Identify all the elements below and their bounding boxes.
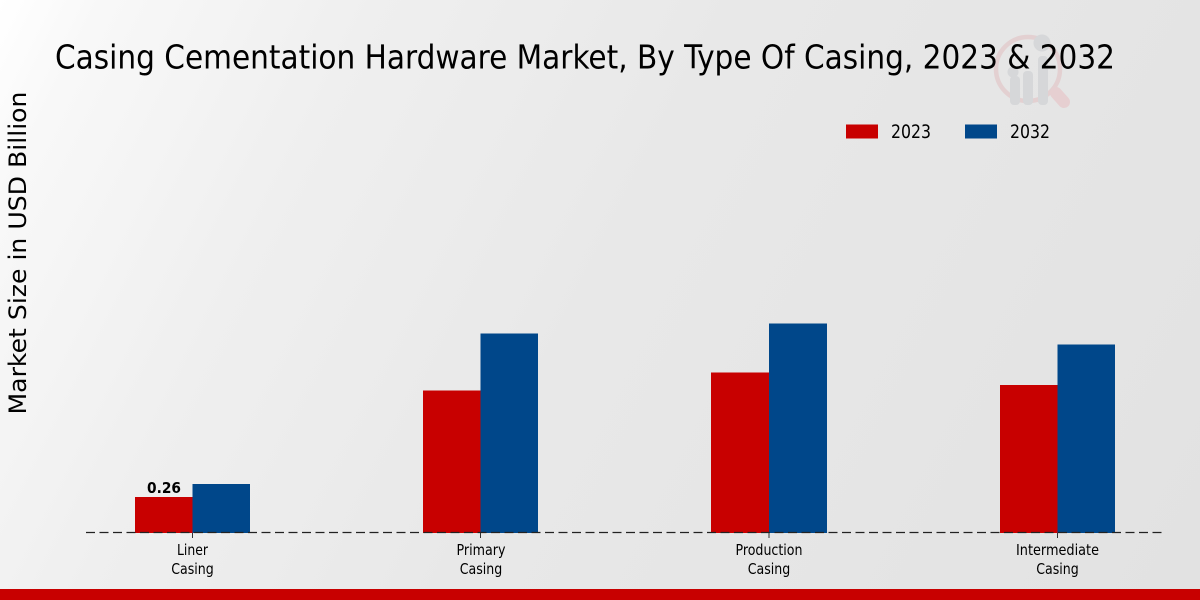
legend item: 2032 bbox=[965, 121, 1050, 143]
category label: Production Casing: Casing bbox=[748, 560, 790, 578]
bar chart bbox=[86, 324, 1164, 578]
category label: Intermediate Casing bbox=[1016, 541, 1099, 578]
category label: Production Casing bbox=[736, 541, 802, 578]
bars: Production Casing bbox=[711, 324, 827, 533]
legend item: 2023: 2023 bbox=[891, 121, 931, 143]
y-axis label: Market Size in USD Billion bbox=[4, 92, 32, 414]
category label: Primary Casing: Primary bbox=[456, 541, 506, 559]
legend item: 2023 bbox=[846, 121, 931, 143]
category label: Liner Casing: Casing bbox=[171, 560, 214, 578]
legend bbox=[846, 121, 1050, 143]
category label: Primary Casing bbox=[456, 541, 506, 578]
bars: Primary Casing bbox=[423, 334, 538, 533]
category label: Intermediate Casing: Casing bbox=[1036, 560, 1079, 578]
bars: Liner Casing bbox=[135, 484, 250, 533]
icon: watermark logo bbox=[996, 34, 1064, 105]
x axis baseline bbox=[86, 532, 1164, 534]
title: Casing Cementation Hardware Market, By Type Of Casing, 2023 & 2032 bbox=[55, 38, 1115, 76]
category label: Production Casing: Production bbox=[736, 541, 802, 559]
footer bar bbox=[0, 589, 1200, 600]
category label: Liner Casing bbox=[171, 541, 214, 578]
legend item: 2032: 2032 bbox=[1010, 121, 1050, 143]
category label: Primary Casing: Casing bbox=[460, 560, 502, 578]
category label: Intermediate Casing: Intermediate bbox=[1016, 541, 1099, 559]
bars: Intermediate Casing bbox=[1000, 344, 1115, 533]
value label: 0.26 bbox=[147, 479, 181, 497]
category label: Liner Casing: Liner bbox=[177, 541, 208, 559]
